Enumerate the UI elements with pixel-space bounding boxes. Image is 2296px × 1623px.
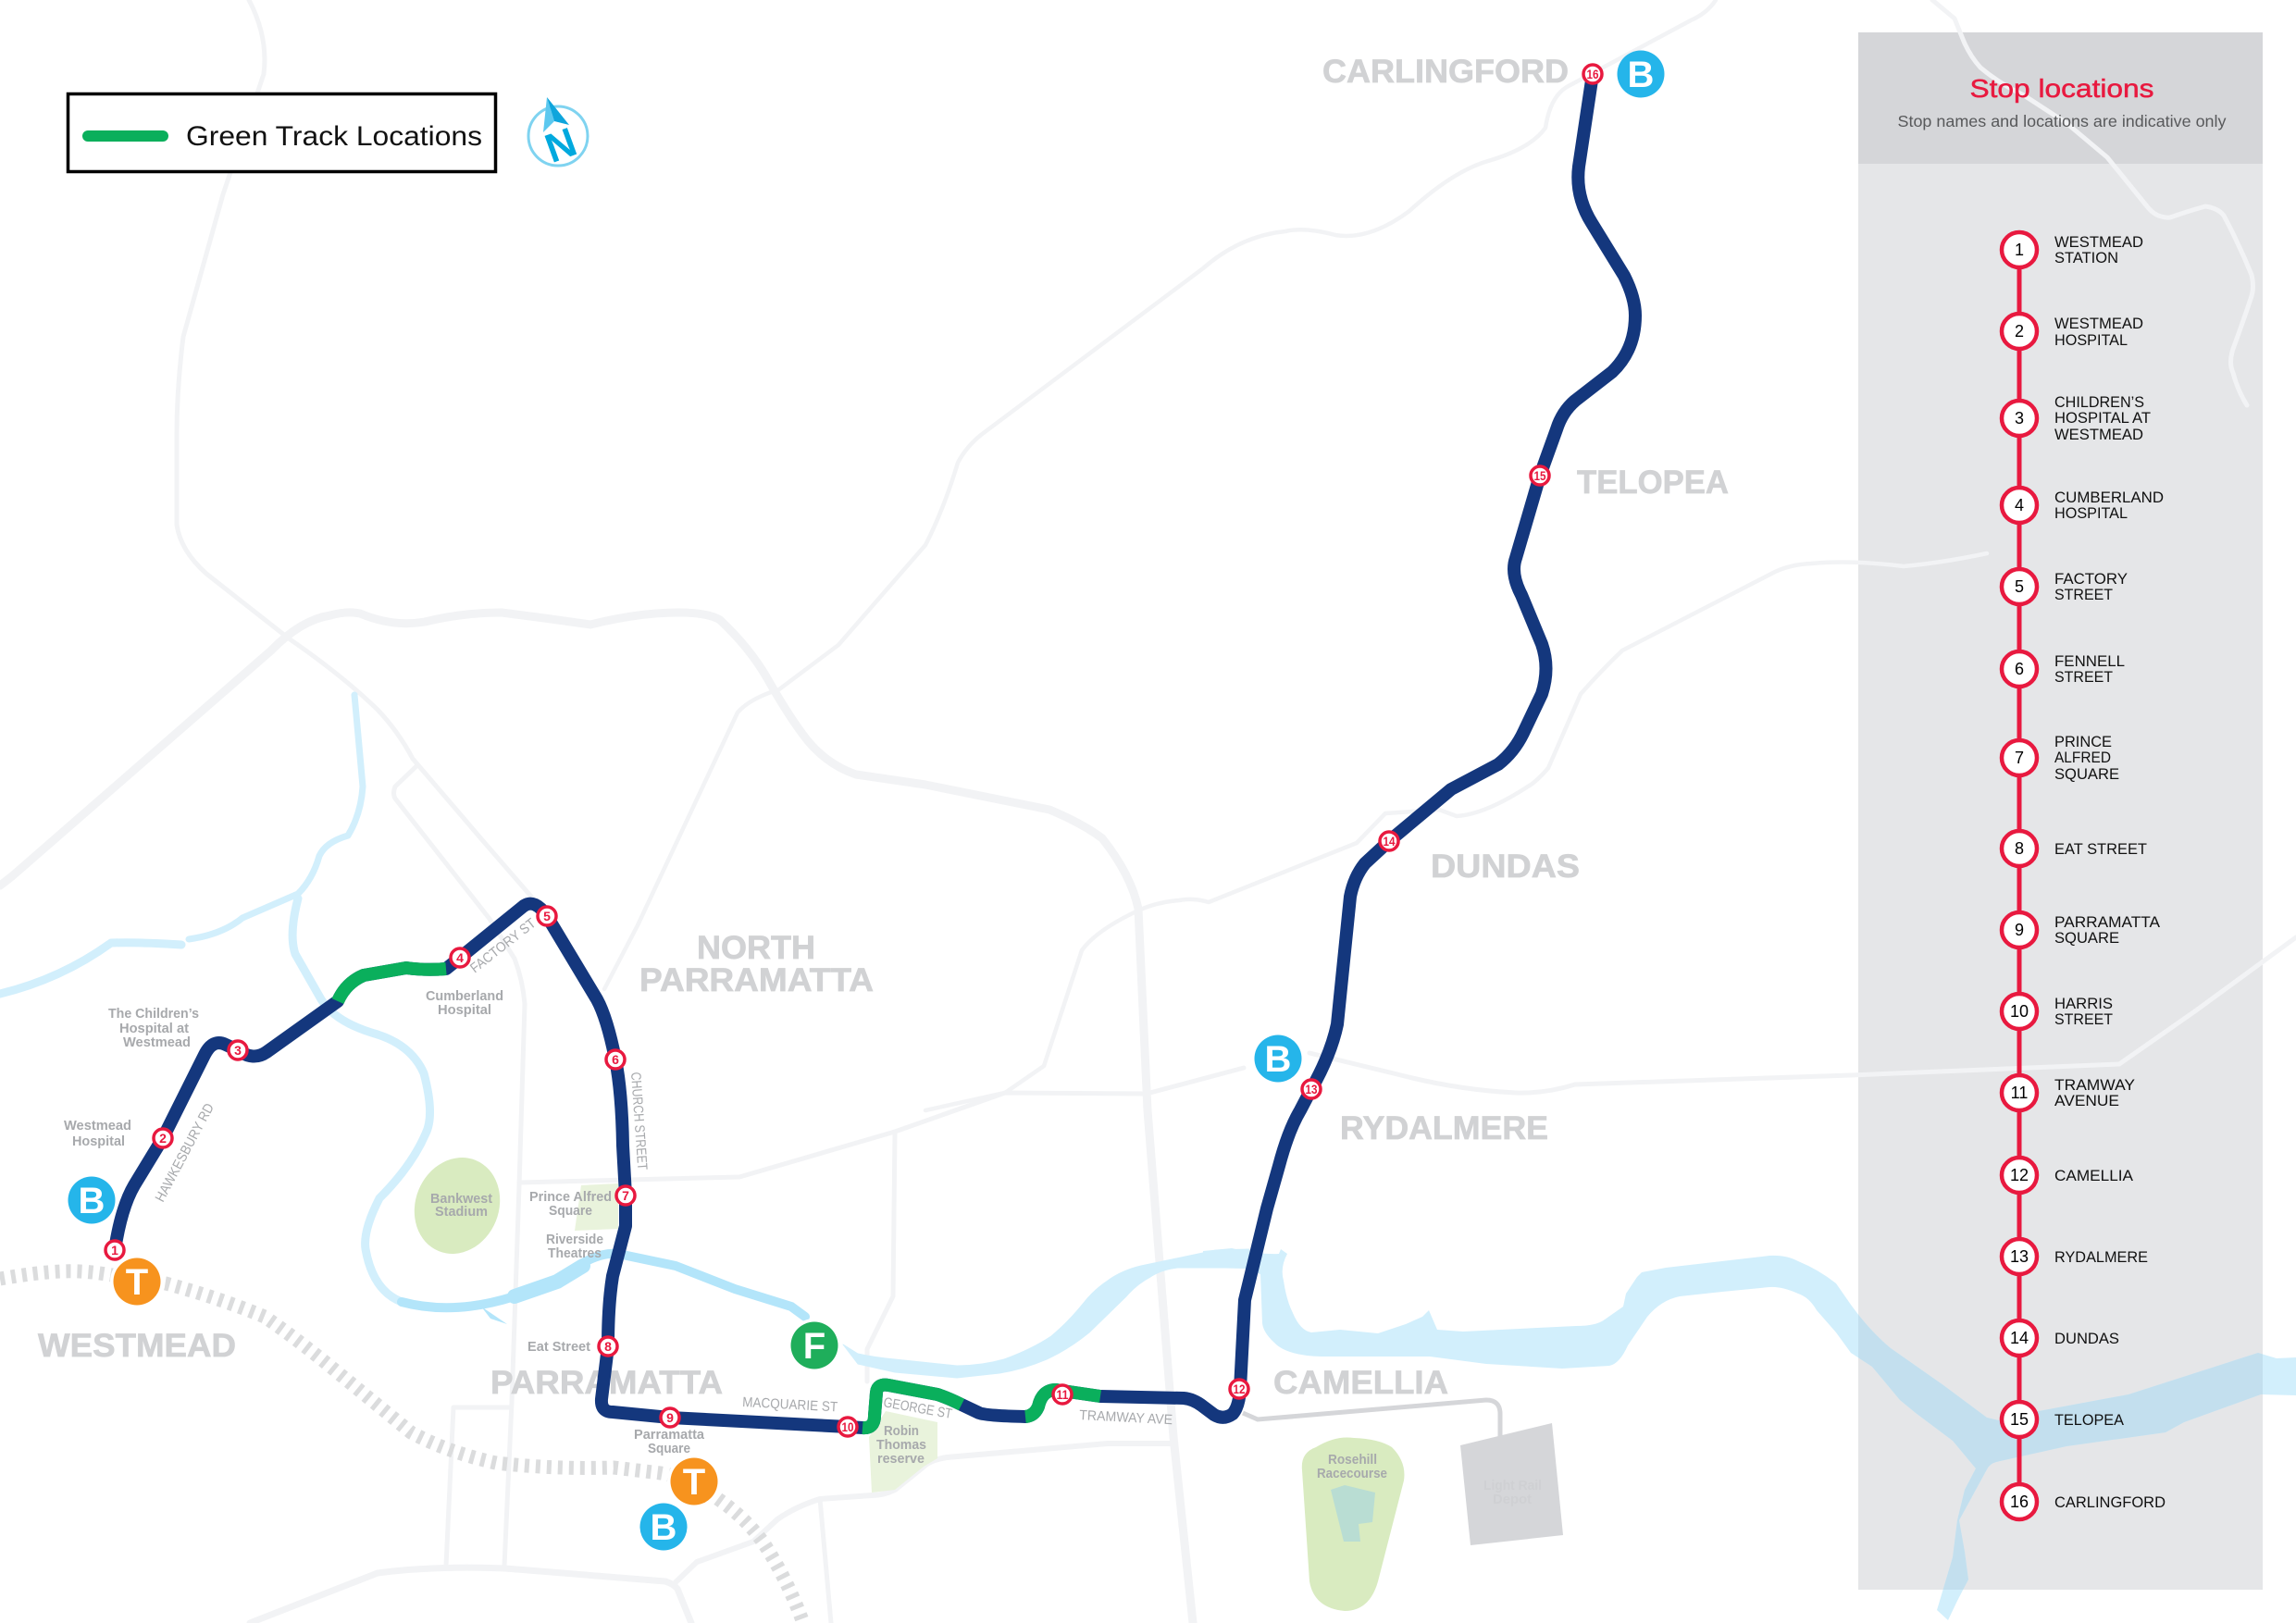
icon: bus Carlingford: B: [1628, 55, 1654, 95]
icon: bus Westmead: [68, 1177, 115, 1223]
place labels: Square: [549, 1204, 592, 1219]
suburb labels: TELOPEA: [1577, 465, 1729, 501]
stop 14: DUNDAS: [2054, 1331, 2119, 1347]
map stop numbers: 4: [456, 950, 464, 965]
stop 12: [2002, 1158, 2133, 1193]
stop 9: 9: [2015, 921, 2024, 939]
light rail depot: [1460, 1423, 1563, 1545]
place labels: Westmead: [64, 1119, 131, 1134]
map stop numbers: 9: [666, 1410, 674, 1425]
icon: bus Westmead: B: [79, 1181, 105, 1221]
map stop numbers: 3: [234, 1043, 242, 1058]
place labels: reserve: [877, 1452, 925, 1467]
street labels: FACTORY ST: [467, 915, 539, 976]
stop 6: FENNELL: [2054, 653, 2125, 670]
legend: [68, 94, 496, 172]
stop 10: HARRIS: [2054, 996, 2113, 1012]
place labels: [64, 989, 1387, 1481]
rail line: [0, 1271, 803, 1623]
suburb labels: CARLINGFORD: [1322, 54, 1569, 90]
stop 14: [2002, 1320, 2119, 1356]
suburb labels: NORTH: [697, 930, 815, 966]
stop 1: 1: [2015, 241, 2024, 259]
stop 5: 5: [2015, 577, 2024, 596]
map stop numbers: 14: [1383, 834, 1396, 849]
place labels: Thomas: [876, 1438, 926, 1453]
icon: north arrow: N: [540, 119, 582, 172]
map stop numbers: 7: [622, 1188, 629, 1203]
stop 1: WESTMEAD: [2054, 234, 2143, 251]
map stop numbers: 10: [842, 1419, 854, 1434]
park: Bankwest Stadium: [400, 1145, 515, 1267]
green track segments: [338, 968, 1100, 1428]
legend: Green Track Locations: [186, 121, 482, 152]
stop 3: 3: [2015, 409, 2024, 427]
icon: bus Parramatta: B: [651, 1507, 676, 1548]
stop 14: 14: [2010, 1329, 2029, 1347]
stop 9: PARRAMATTA: [2054, 914, 2160, 931]
map stop numbers: 5: [543, 909, 551, 923]
place labels: Racecourse: [1317, 1467, 1387, 1481]
stop 11: AVENUE: [2054, 1093, 2119, 1109]
stop 7: 7: [2015, 749, 2024, 767]
icon: bus Carlingford: [1618, 50, 1664, 98]
icon: ferry: F: [803, 1326, 825, 1367]
icon: train Westmead: [110, 1255, 164, 1308]
stop 11: [2002, 1075, 2135, 1110]
suburb labels: PARRAMATTA: [639, 962, 874, 998]
pond at racecourse: [1331, 1485, 1375, 1542]
stop 1: [2002, 232, 2143, 267]
stop 7: SQUARE: [2054, 766, 2119, 783]
suburb labels: CAMELLIA: [1273, 1365, 1448, 1401]
stop 9: SQUARE: [2054, 930, 2119, 947]
place labels: Theatres: [548, 1246, 602, 1261]
place labels: Eat Street: [527, 1340, 590, 1355]
stop 2: WESTMEAD: [2054, 316, 2143, 332]
stop 11: 11: [2011, 1084, 2028, 1102]
stop 3: HOSPITAL AT: [2054, 410, 2151, 427]
stop 12: 12: [2010, 1166, 2029, 1184]
stop 9: [2002, 912, 2160, 948]
icon: ferry: [788, 1319, 841, 1372]
place labels: Stadium: [435, 1205, 488, 1220]
icon: bus Rydalmere: B: [1265, 1039, 1291, 1080]
stop 16: 16: [2010, 1493, 2029, 1511]
stop 12: CAMELLIA: [2054, 1168, 2133, 1184]
panel: stop locations background: [1858, 32, 2263, 1590]
place labels: Bankwest: [430, 1192, 492, 1207]
map stop markers: [105, 65, 1602, 1436]
place labels: Robin: [884, 1424, 919, 1439]
suburb labels: RYDALMERE: [1340, 1110, 1548, 1146]
map stop numbers: 13: [1305, 1082, 1318, 1096]
map stop numbers: [111, 67, 1599, 1434]
icon: train Westmead: T: [126, 1262, 148, 1303]
street labels: CHURCH STREET: [627, 1072, 650, 1171]
stop list line: [2017, 250, 2021, 1502]
map stop numbers: 15: [1534, 468, 1546, 483]
light rail depot: Light Rail: [1483, 1479, 1542, 1493]
stop 5: [2002, 569, 2128, 604]
rivers: [0, 695, 2296, 1620]
stop 1: STATION: [2054, 250, 2118, 266]
place labels: Hospital: [72, 1134, 125, 1149]
stop 13: [2002, 1239, 2148, 1274]
stop 5: STREET: [2054, 587, 2113, 603]
map stop numbers: 8: [604, 1339, 612, 1354]
place labels: Rosehill: [1328, 1453, 1377, 1468]
place labels: Hospital: [438, 1003, 491, 1018]
stop 2: HOSPITAL: [2054, 332, 2128, 349]
stop 16: [2002, 1484, 2166, 1519]
street labels: HAWKESBURY RD: [153, 1101, 217, 1205]
stop 2: [2002, 314, 2143, 349]
icon: bus Rydalmere: [1255, 1035, 1301, 1083]
place labels: Riverside: [546, 1233, 603, 1247]
icon: train Parramatta: T: [683, 1462, 705, 1503]
stop 13: RYDALMERE: [2054, 1249, 2148, 1266]
stop 11: TRAMWAY: [2054, 1077, 2135, 1094]
stop 6: 6: [2015, 660, 2024, 678]
stop 10: STREET: [2054, 1011, 2113, 1028]
stop 4: CUMBERLAND: [2054, 489, 2164, 506]
stop 15: [2002, 1402, 2124, 1437]
map stop numbers: 16: [1586, 67, 1599, 81]
stop 4: HOSPITAL: [2054, 505, 2128, 522]
stop 8: 8: [2015, 839, 2024, 858]
panel heading: Stop names and locations are indicative only: [1897, 112, 2227, 130]
map stop numbers: 1: [111, 1243, 118, 1258]
suburb labels: WESTMEAD: [38, 1328, 236, 1364]
stop 8: EAT STREET: [2054, 841, 2147, 858]
stop 7: ALFRED: [2054, 750, 2111, 766]
stop 15: 15: [2010, 1410, 2029, 1429]
stop 10: [2002, 994, 2113, 1029]
street labels: MACQUARIE ST: [742, 1394, 838, 1415]
depot access line: [1243, 1400, 1500, 1437]
panel heading: Stop locations: [1969, 74, 2154, 103]
light rail depot: Depot: [1493, 1493, 1532, 1507]
icon: train Parramatta: [667, 1455, 721, 1508]
stop 6: STREET: [2054, 669, 2113, 686]
place labels: Square: [648, 1442, 690, 1456]
stop 6: [2002, 651, 2125, 687]
stop 15: TELOPEA: [2054, 1412, 2124, 1429]
stop 10: 10: [2010, 1002, 2029, 1021]
stop list: [2002, 232, 2166, 1519]
stop 4: 4: [2015, 496, 2024, 514]
stop 4: [2002, 488, 2164, 523]
stop 5: FACTORY: [2054, 571, 2128, 588]
street labels: TRAMWAY AVE: [1079, 1407, 1173, 1428]
map stop numbers: 12: [1233, 1381, 1246, 1396]
stop 3: WESTMEAD: [2054, 427, 2143, 443]
stop 3: CHILDREN’S: [2054, 394, 2144, 411]
stop 13: 13: [2010, 1247, 2029, 1266]
place labels: Cumberland: [426, 989, 503, 1004]
map stop numbers: 2: [159, 1131, 167, 1146]
suburb labels: DUNDAS: [1431, 849, 1580, 885]
place labels: Prince Alfred: [529, 1190, 612, 1205]
map stop numbers: 6: [612, 1052, 619, 1067]
stop 2: 2: [2015, 322, 2024, 341]
stop 7: PRINCE: [2054, 734, 2112, 750]
icon: bus Parramatta: [640, 1503, 687, 1551]
map stop numbers: 11: [1057, 1387, 1069, 1402]
place labels: Westmead: [123, 1035, 191, 1050]
suburb labels: [38, 54, 1729, 1401]
stop 3: [2002, 394, 2151, 443]
panel heading: [1897, 74, 2227, 130]
stop 16: CARLINGFORD: [2054, 1494, 2166, 1511]
street labels: [153, 915, 1173, 1428]
suburb labels: PARRAMATTA: [490, 1365, 723, 1401]
street labels: GEORGE ST: [882, 1394, 953, 1422]
place labels: The Children’s: [108, 1007, 199, 1022]
park: Robin Thomas reserve: [869, 1411, 937, 1493]
icon: north arrow: [528, 97, 588, 172]
place labels: Hospital at: [119, 1022, 189, 1036]
stop 8: [2002, 831, 2147, 866]
light rail route: [115, 74, 1635, 1428]
park: Prince Alfred Square: [575, 1183, 618, 1231]
stop 7: [2002, 734, 2119, 783]
park: Rosehill Racecourse: [1302, 1437, 1404, 1611]
place labels: Parramatta: [634, 1428, 705, 1443]
